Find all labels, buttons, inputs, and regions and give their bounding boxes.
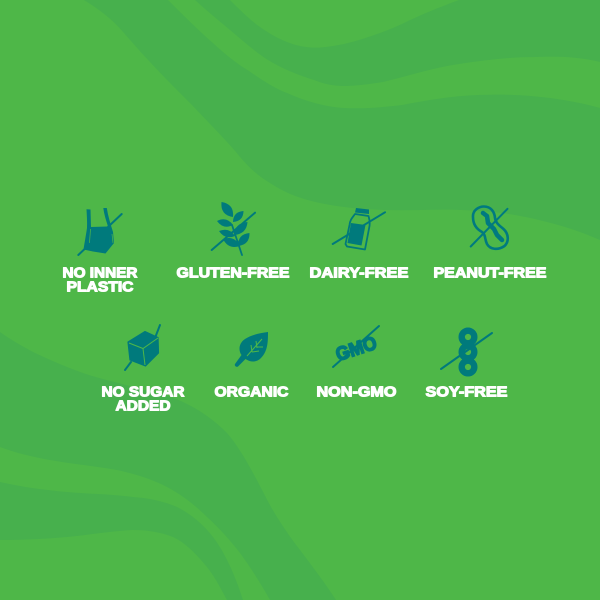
icon: no plastic bag bbox=[78, 208, 122, 255]
background wave: bottom light corner bbox=[0, 530, 227, 600]
label: gluten-free: GLUTEN-FREE bbox=[176, 266, 290, 282]
background wave: top light ribbon bbox=[168, 0, 600, 108]
icon: no GMO: GMO bbox=[333, 333, 380, 366]
background wave: bottom light ribbon bbox=[0, 447, 270, 600]
background wave: top light corner bbox=[230, 0, 459, 48]
icon: no dairy bottle bbox=[333, 208, 385, 250]
icon: no sugar cube bbox=[125, 325, 160, 370]
label: peanut-free: PEANUT-FREE bbox=[434, 266, 547, 282]
background wave: bottom left dark band bbox=[0, 332, 336, 600]
background wave: top right dark band bbox=[84, 0, 600, 240]
label: dairy-free: DAIRY-FREE bbox=[310, 266, 409, 282]
label: no inner plastic: NO INNER bbox=[62, 266, 138, 282]
icon: no gluten wheat bbox=[212, 202, 255, 255]
label: non-gmo: NON-GMO bbox=[316, 384, 396, 400]
label: no sugar added: ADDED bbox=[116, 398, 170, 414]
icon: no peanut bbox=[471, 206, 508, 249]
label: no sugar added bbox=[102, 384, 185, 414]
label: no sugar added: NO SUGAR bbox=[102, 384, 185, 400]
label: soy-free: SOY-FREE bbox=[426, 384, 508, 400]
label: no inner plastic: PLASTIC bbox=[66, 280, 134, 296]
icon: no soy bbox=[441, 331, 492, 373]
icon: organic leaf bbox=[235, 332, 268, 367]
label: no inner plastic bbox=[62, 266, 138, 296]
label: organic: ORGANIC bbox=[214, 384, 289, 400]
